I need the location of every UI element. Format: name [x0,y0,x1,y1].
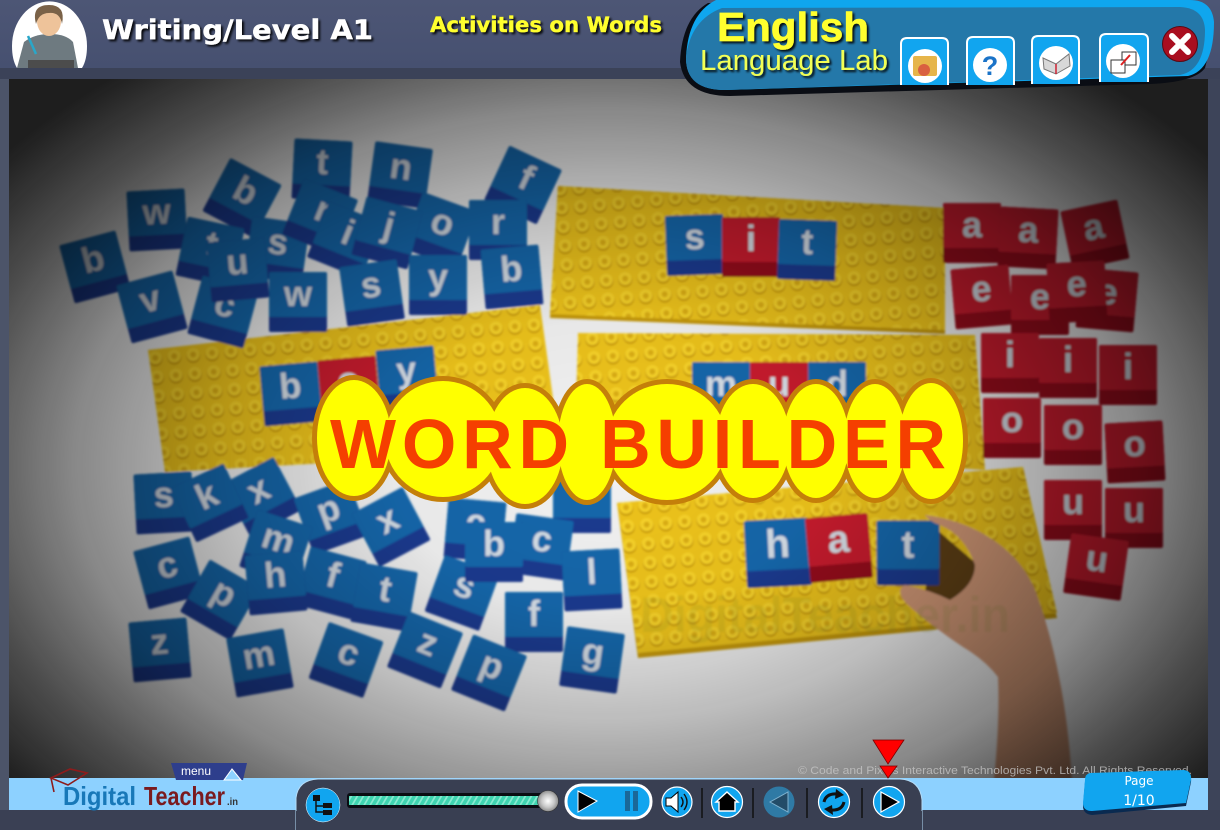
red letter blocks: e [1030,276,1050,317]
logo: Digital Teacher [51,769,238,811]
blue letter blocks, upper pile: r [491,201,505,242]
blue letter blocks, upper pile: b [77,236,109,281]
red letter blocks: e [969,267,993,310]
board: sit [550,186,945,334]
control bar [296,779,922,830]
board: sit: t [801,221,814,262]
blue letter blocks, lower pile: z [149,620,170,663]
blue letter blocks, upper pile: b [499,247,524,290]
faint watermark: DigitalTeacher.in [640,587,1010,643]
blue letter blocks, lower pile: b [483,523,505,564]
red letter blocks: i [1005,334,1015,375]
board: boy: b [278,364,303,407]
board: boy: o [336,358,361,401]
blue letter blocks, lower pile: x [240,467,276,512]
board: mud: u [768,363,790,404]
board: mud: d [826,363,848,404]
blue letter blocks, lower pile: c [332,629,365,675]
subheading: Activities on Words: Activities on Words [430,13,662,37]
blue letter blocks, lower pile: f [322,553,345,596]
tab: book [1032,36,1079,84]
blue letter blocks, lower pile: g [579,630,607,673]
outline button [306,788,340,822]
close button [1162,26,1198,62]
footer strip [0,778,1220,830]
title text: WORD BUILDER [330,405,946,483]
red letter blocks: a [1017,209,1040,251]
blue letter blocks, upper pile: b [227,167,265,214]
blue letter blocks, upper pile: t [202,222,222,265]
hand [900,515,1072,780]
control separators [702,788,862,818]
page indicator: Page [1124,774,1154,788]
blue letter blocks, upper pile: s [358,263,384,306]
tab: help: ? [982,51,998,81]
logo: Digital Teacher: Teacher [144,781,225,811]
red letter blocks: u [1062,481,1084,522]
red letter blocks: a [1079,204,1108,249]
blue letter blocks, lower pile: p [474,642,510,688]
board: boy: y [394,348,418,391]
blue letter blocks, upper pile: i [336,211,361,253]
board: hat [617,467,1057,658]
play pause control [566,785,651,818]
red letter blocks: o [1122,422,1147,465]
red letter blocks: e [1096,270,1120,313]
blue letter blocks, lower pile: s [152,474,175,516]
menu tab: menu [181,764,211,778]
board: hat: t [902,523,915,566]
heading: Writing/Level A1: Writing/Level A1 [102,15,373,46]
blue letter blocks, lower pile: m [257,514,300,563]
red letter blocks: u [1083,537,1111,580]
tab: help [967,37,1014,85]
red letter blocks: i [1063,339,1073,380]
blue letter blocks, lower pile: c [529,517,555,560]
blue letter blocks, upper pile: r [309,187,337,231]
red letter blocks [943,200,1166,601]
blue letter blocks, upper pile: v [135,276,165,321]
brand: English: English [717,4,869,50]
speaker button [662,787,692,817]
blue letter blocks, lower pile: s [448,562,481,608]
brand: Language Lab: Language Lab [700,45,888,77]
blue letter blocks, upper pile: w [283,273,313,314]
board: sit: i [746,218,756,259]
blue letter blocks, upper pile: u [225,240,250,283]
red letter blocks: o [1001,399,1023,440]
logo: Digital Teacher: .in [227,797,238,808]
home button [712,786,742,818]
page indicator [1083,770,1191,815]
blue letter blocks, upper pile: y [428,256,448,297]
red letter blocks: o [1062,406,1084,447]
blue letter blocks, upper pile: w [140,190,173,233]
blue letter blocks, upper pile [59,139,562,348]
panel: English Language Lab toolbar [680,0,1214,96]
board: boy [148,305,560,472]
header bar [0,0,1220,79]
page indicator: 1/10 [1123,793,1155,809]
blue letter blocks, lower pile: l [585,551,598,592]
blue letter blocks, lower pile: p [204,569,244,616]
red letter blocks: a [962,204,983,245]
next button [874,786,904,818]
red letter blocks: e [1065,263,1088,305]
board: mud: m [705,363,737,404]
blue letter blocks, lower pile: h [263,553,288,596]
blue letter blocks, lower pile: p [311,486,345,532]
blue letter blocks, upper pile: f [512,156,542,199]
board: sit: s [684,216,705,257]
progress bar [347,790,558,812]
blue letter blocks, lower pile: z [412,620,444,664]
blue letter blocks, lower pile: k [189,472,225,518]
red letter blocks: i [1123,346,1133,387]
board: mud [575,333,985,470]
board: hat: a [826,517,851,562]
logo: Digital Teacher: Digital [63,781,136,811]
back button disabled [764,786,794,818]
blue letter blocks, lower pile: t [376,567,395,610]
blue letter blocks, upper pile: s [265,220,291,263]
blue letter blocks, upper pile: o [426,199,460,245]
blue letter blocks, lower pile: f [528,593,541,634]
blue letter blocks, lower pile: c [464,500,488,543]
blue letter blocks, lower pile [128,457,625,712]
avatar: student writing [12,1,87,68]
title cloud: WORD BUILDER [317,380,963,504]
tab: folder [901,38,948,85]
replay button [818,786,850,818]
blue letter blocks, lower pile: x [369,497,405,542]
blue letter blocks, upper pile: n [387,145,415,188]
copyright notice: © Code and Pixels Interactive Technologies Pvt. Ltd. All Rights Reserved. [798,765,1192,777]
board: hat: h [764,520,791,567]
blue letter blocks, upper pile: t [315,141,330,182]
menu tab [171,763,247,780]
red pointer arrow [873,740,904,778]
tab: resize [1100,34,1148,82]
blue letter blocks, upper pile: j [378,203,399,246]
blue letter blocks, lower pile: m [239,632,278,678]
red letter blocks: u [1123,489,1145,530]
blue letter blocks, upper pile: c [210,281,240,326]
blue letter blocks, lower pile: c [152,542,182,587]
